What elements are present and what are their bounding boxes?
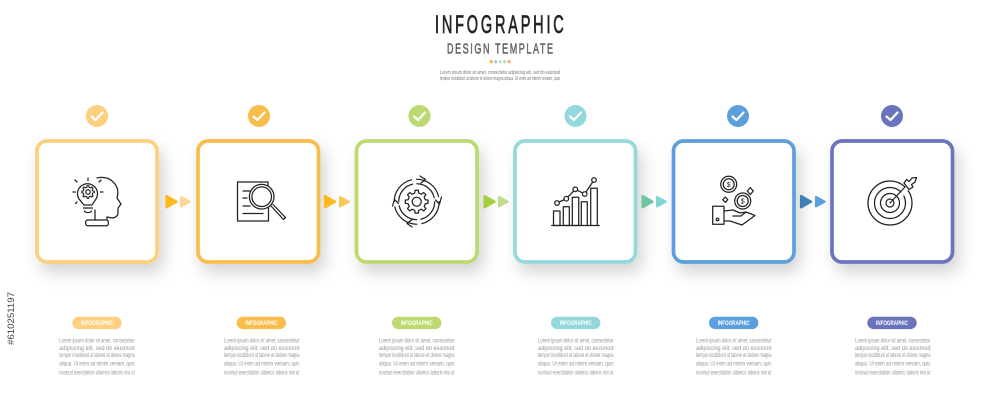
paragraph 3: adipiscing elit, sed do eiusmod	[379, 346, 454, 352]
paragraph 3: Lorem ipsum dolor sit amet, consectetur	[379, 338, 454, 344]
paragraph 3: tempor incididunt ut labore et dolore magna	[379, 353, 455, 359]
arrow pair 5	[801, 196, 825, 207]
pill 6: INFOGRAPHIC	[876, 321, 909, 327]
paragraph 6: Lorem ipsum dolor sit amet, consectetur	[855, 338, 930, 344]
stock image id: #610251197	[6, 292, 16, 345]
icon: target with arrow	[868, 178, 916, 225]
title: INFOGRAPHIC	[435, 12, 564, 39]
column text 6	[855, 317, 931, 376]
column text 5	[696, 317, 772, 376]
column text 3	[379, 317, 455, 376]
check badge 6	[881, 105, 903, 127]
paragraph 1	[59, 338, 135, 376]
paragraph 6: tempor incididunt ut labore et dolore magna	[855, 353, 931, 359]
paragraph 4: nostrud exercitation ullamco laboris nisi ut	[538, 370, 614, 376]
paragraph 2: aliqua. Ut enim ad minim veniam, quis	[224, 362, 299, 368]
check badge 5	[727, 105, 749, 127]
check badge 1	[86, 105, 108, 127]
paragraph 5: adipiscing elit, sed do eiusmod	[696, 346, 771, 352]
paragraph 4: adipiscing elit, sed do eiusmod	[538, 346, 613, 352]
column text 4	[538, 317, 614, 376]
paragraph 6: adipiscing elit, sed do eiusmod	[855, 346, 930, 352]
pill 3: INFOGRAPHIC	[401, 321, 433, 327]
arrow pair 4	[642, 196, 666, 207]
paragraph 4: aliqua. Ut enim ad minim veniam, quis	[538, 362, 613, 368]
intro text: tempor incididunt ut labore et dolore magna aliqua. Ut enim ad minim veniam, quis	[440, 76, 560, 82]
paragraph 5: tempor incididunt ut labore et dolore magna	[696, 353, 772, 359]
card 2	[198, 141, 318, 262]
check badge 3	[408, 105, 430, 127]
paragraph 5	[696, 338, 772, 376]
pill 2: INFOGRAPHIC	[245, 321, 278, 327]
paragraph 3: nostrud exercitation ullamco laboris nisi ut	[379, 370, 455, 376]
pill 5: INFOGRAPHIC	[718, 321, 750, 327]
paragraph 3: aliqua. Ut enim ad minim veniam, quis	[379, 362, 454, 368]
icon: document with magnifier	[238, 182, 286, 221]
pill 1: INFOGRAPHIC	[81, 321, 114, 327]
card 3	[356, 141, 477, 262]
icon: hand with coins: $	[741, 199, 745, 206]
dots	[490, 60, 511, 63]
paragraph 1: aliqua. Ut enim ad minim veniam, quis	[59, 362, 135, 368]
arrow pair 3	[484, 196, 508, 207]
card 1	[37, 141, 157, 262]
intro text: Lorem ipsum dolor sit amet, consectetur adipiscing elit, sed do eiusmod	[440, 70, 560, 76]
paragraph 6	[855, 338, 931, 376]
card 4	[515, 141, 636, 262]
paragraph 6: nostrud exercitation ullamco laboris nisi ut	[855, 370, 931, 376]
arrow pair 1	[166, 196, 190, 207]
icon: hand with coins	[713, 176, 755, 225]
paragraph 4: tempor incididunt ut labore et dolore magna	[538, 353, 614, 359]
paragraph 2: nostrud exercitation ullamco laboris nisi ut	[224, 370, 300, 376]
paragraph 2: Lorem ipsum dolor sit amet, consectetur	[224, 338, 299, 344]
pill 4: INFOGRAPHIC	[560, 321, 592, 327]
paragraph 6: aliqua. Ut enim ad minim veniam, quis	[855, 362, 930, 368]
paragraph 2	[224, 338, 300, 376]
card 6	[832, 141, 952, 262]
header	[435, 12, 564, 82]
paragraph 5: Lorem ipsum dolor sit amet, consectetur	[696, 338, 771, 344]
check badge 4	[564, 105, 586, 127]
paragraph 1: tempor incididunt ut labore et dolore magna	[59, 353, 135, 359]
paragraph 2: tempor incididunt ut labore et dolore magna	[224, 353, 300, 359]
column text 1	[59, 317, 135, 376]
icon: hand with coins: $	[727, 182, 731, 189]
paragraph 1: nostrud exercitation ullamco laboris nisi ut	[59, 370, 135, 376]
paragraph 5: nostrud exercitation ullamco laboris nisi ut	[696, 370, 772, 376]
paragraph 2: adipiscing elit, sed do eiusmod	[224, 346, 299, 352]
icon: head with light bulb	[73, 177, 121, 226]
intro text	[440, 70, 560, 82]
column text 2	[224, 317, 300, 376]
check badge 2	[248, 105, 270, 127]
icon: cycle with gear	[392, 176, 442, 227]
paragraph 1: adipiscing elit, sed do eiusmod	[59, 346, 135, 352]
icon: bar chart with rising line	[552, 178, 599, 226]
paragraph 4: Lorem ipsum dolor sit amet, consectetur	[538, 338, 613, 344]
card 5	[674, 141, 794, 262]
paragraph 3	[379, 338, 455, 376]
paragraph 1: Lorem ipsum dolor sit amet, consectetur	[59, 338, 135, 344]
paragraph 4	[538, 338, 614, 376]
paragraph 5: aliqua. Ut enim ad minim veniam, quis	[696, 362, 771, 368]
arrow pair 2	[325, 196, 349, 207]
subtitle: DESIGN TEMPLATE	[447, 40, 553, 57]
